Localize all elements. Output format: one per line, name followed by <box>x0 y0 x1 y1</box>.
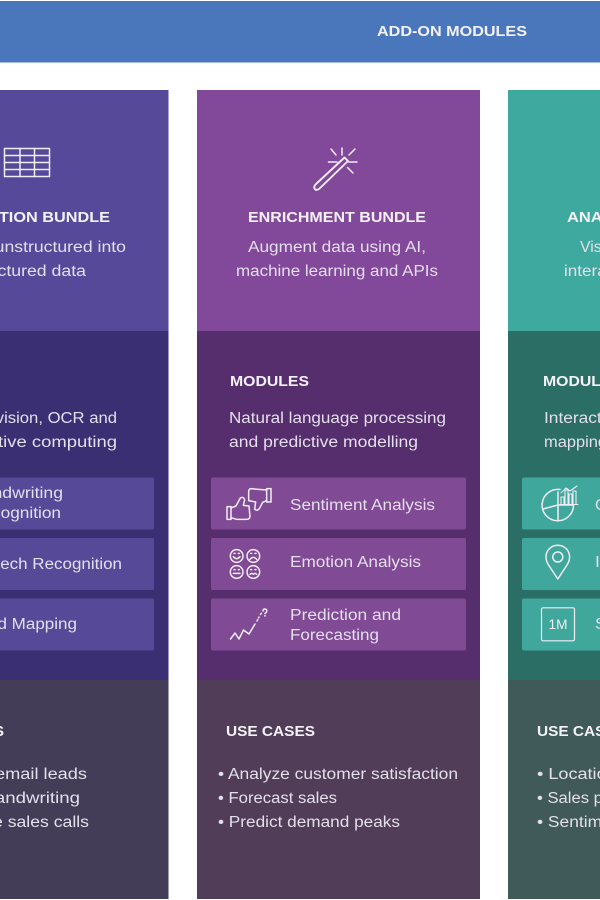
panel: enrichment bundle <box>197 90 480 899</box>
enrichment modules section: Natural language processing <box>229 410 446 427</box>
module: field mapping <box>0 598 154 650</box>
analytics modules section <box>508 331 600 680</box>
enrichment use cases section: • Analyze customer satisfaction <box>218 766 458 783</box>
module: sentiment analysis: Sentiment Analysis <box>290 497 435 514</box>
enrichment bundle intro section: machine learning and APIs <box>236 263 438 280</box>
analytics use cases section <box>508 680 600 899</box>
module: interactive maps <box>522 538 600 590</box>
enrichment use cases section: • Forecast sales <box>218 790 337 807</box>
module: emotion analysis <box>211 538 466 590</box>
enrichment modules section: MODULES <box>230 374 309 390</box>
enrichment bundle intro section <box>197 90 480 331</box>
icon: map pin <box>546 545 570 579</box>
panel: analytics bundle <box>508 90 600 899</box>
analytics bundle intro section <box>508 90 600 331</box>
extraction modules section <box>0 331 168 680</box>
module: charts and graphs <box>522 478 600 530</box>
module: prediction and forecasting <box>211 598 466 650</box>
icon: magic wand <box>314 148 357 190</box>
module: handwriting recognition <box>0 478 154 530</box>
icon: emotion faces <box>230 550 260 578</box>
enrichment bundle intro section: ENRICHMENT BUNDLE <box>248 210 426 226</box>
icon: 1M scorecard: 1M <box>548 617 568 632</box>
enrichment bundle intro section: Augment data using AI, <box>248 239 426 256</box>
icon: thumbs up and down <box>227 489 271 519</box>
module: scorecards <box>522 598 600 650</box>
enrichment modules section <box>197 331 480 680</box>
module: sentiment analysis <box>211 478 466 530</box>
icon: pie chart with bars <box>542 486 578 521</box>
enrichment use cases section <box>197 680 480 899</box>
panel: extraction bundle <box>0 90 168 899</box>
extraction use cases section <box>0 680 168 899</box>
icon: trend line with question mark <box>230 609 267 639</box>
icon: 1M scorecard <box>542 608 574 641</box>
enrichment use cases section: • Predict demand peaks <box>218 814 400 831</box>
icon: table <box>4 148 50 176</box>
module: speech recognition <box>0 538 154 590</box>
extraction bundle intro section <box>0 90 168 331</box>
enrichment modules section: and predictive modelling <box>229 434 418 451</box>
header banner: add-on modules <box>0 1 600 62</box>
module: prediction and forecasting: Forecasting <box>290 627 379 644</box>
module: emotion analysis: Emotion Analysis <box>290 554 421 571</box>
header banner: add-on modules: ADD-ON MODULES <box>377 24 527 40</box>
enrichment use cases section: USE CASES <box>226 724 315 740</box>
module: prediction and forecasting: Prediction and <box>290 607 401 624</box>
